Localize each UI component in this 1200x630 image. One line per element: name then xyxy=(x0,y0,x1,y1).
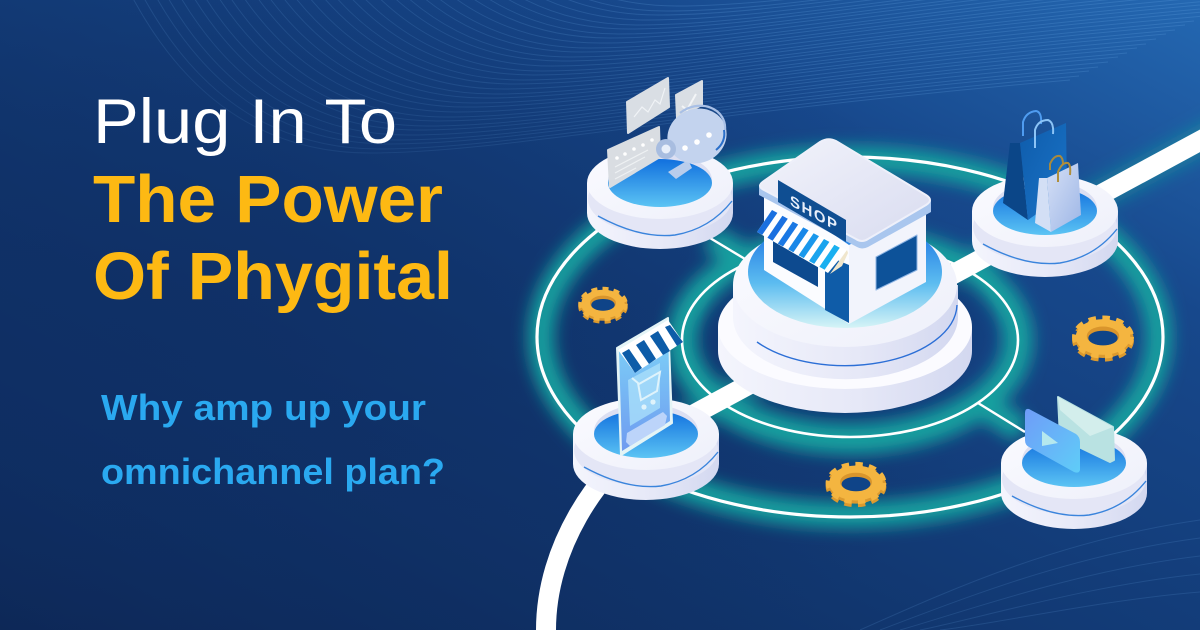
icon: check panel xyxy=(676,81,702,118)
central hub platform xyxy=(718,216,972,413)
spokes xyxy=(705,235,1025,432)
subtitle: Why amp up your xyxy=(101,387,426,428)
awning xyxy=(757,210,848,274)
shop sign: SHOP xyxy=(790,192,839,236)
gear: right xyxy=(1075,319,1131,359)
icon: shop phone xyxy=(617,318,683,455)
right wall xyxy=(849,205,926,324)
door xyxy=(825,255,849,323)
teal ring glow xyxy=(541,130,1200,515)
icon: envelope xyxy=(1058,397,1114,462)
icon: chart panel xyxy=(627,78,669,133)
platform: bottom left with phone xyxy=(573,318,719,500)
gear: left xyxy=(581,289,625,321)
title line: The Power: The Power xyxy=(93,162,443,237)
platform: top right with shopping bags xyxy=(972,111,1118,277)
platform: bottom right with video and mail xyxy=(1001,397,1147,529)
lower tier xyxy=(718,265,972,413)
title xyxy=(93,87,453,314)
icon: list panel xyxy=(608,127,660,187)
upper tier xyxy=(733,216,958,379)
title line: Of Phygital: Of Phygital xyxy=(93,239,453,314)
platform: top left with support dashboard xyxy=(587,78,735,249)
roof xyxy=(759,139,931,248)
title line: Plug In To: Plug In To xyxy=(93,87,397,157)
road xyxy=(546,130,1200,630)
icon: large shopping bag xyxy=(1003,111,1067,220)
shop building xyxy=(757,139,931,324)
subtitle: omnichannel plan? xyxy=(101,451,445,492)
subtitle xyxy=(101,387,445,492)
right window xyxy=(876,235,917,290)
icon: chat headset xyxy=(656,100,735,179)
shop sign xyxy=(778,180,846,242)
gear: bottom xyxy=(829,465,883,504)
icon: small shopping bag xyxy=(1035,156,1081,232)
dark area around the hub xyxy=(700,235,1000,415)
inner ring xyxy=(682,243,1018,437)
phone awning xyxy=(618,320,683,373)
icon: video player xyxy=(1025,409,1080,473)
left wall xyxy=(764,187,849,324)
left window xyxy=(773,240,818,287)
outer ring xyxy=(537,157,1163,517)
